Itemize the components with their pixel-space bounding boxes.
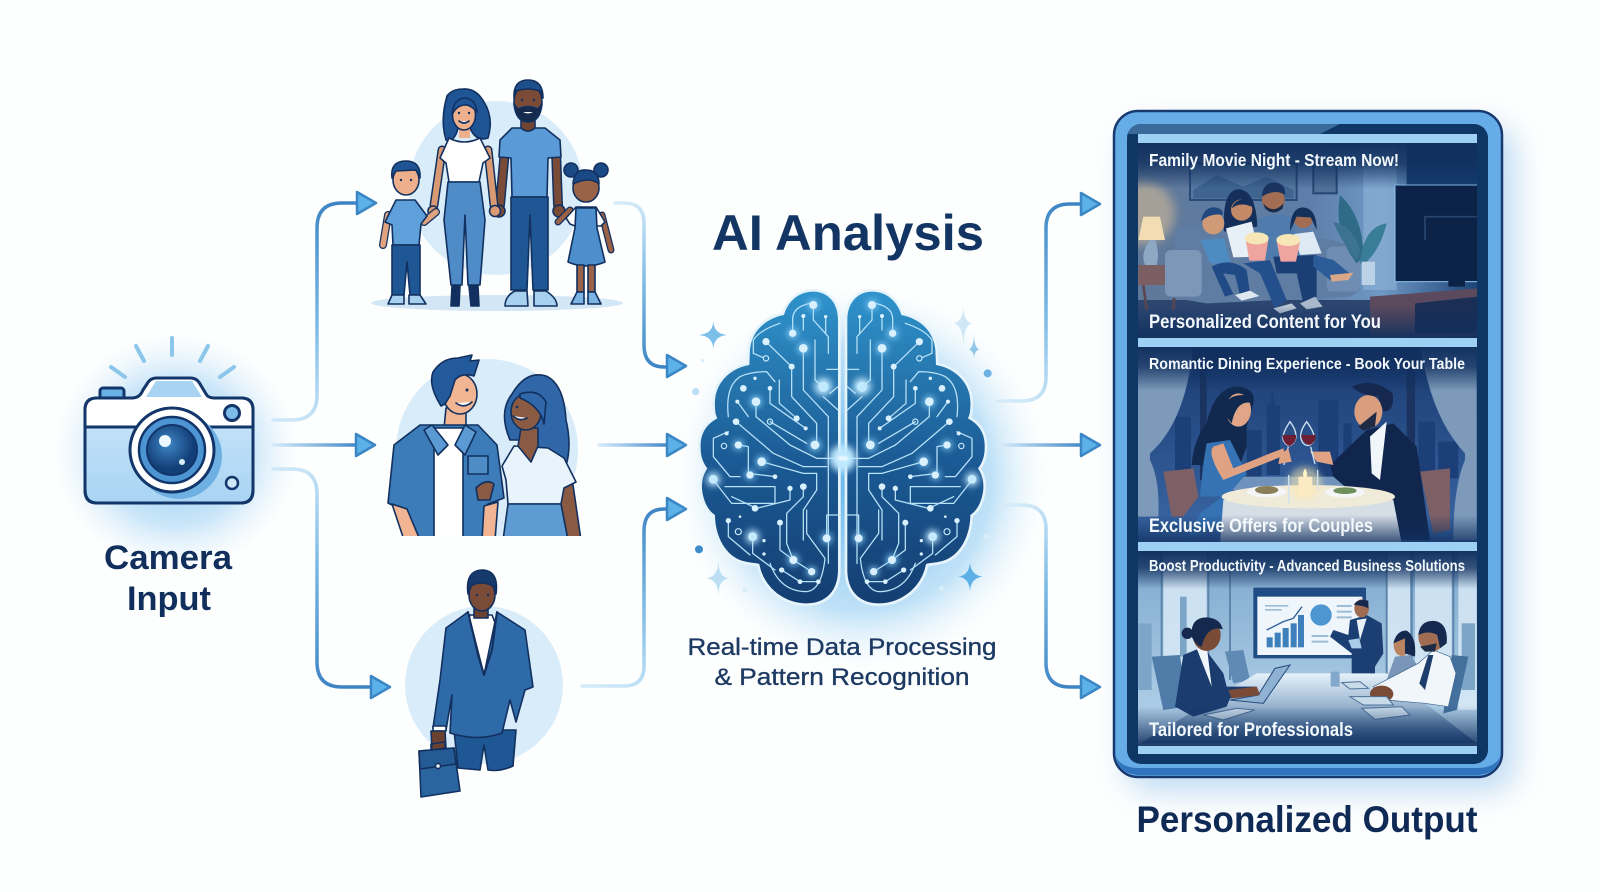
panel 1 tagline: Personalized Content for You [1149,312,1381,333]
table items [1203,682,1410,720]
family on sofa [1257,215,1302,260]
city skyline [1175,403,1458,478]
panel 3 tagline: Tailored for Professionals [1149,720,1353,741]
display frame [1114,111,1502,777]
audience: professional [405,570,563,797]
arrows from audience to brain [582,203,686,686]
seated man [1373,650,1456,707]
lamp and table [1138,217,1165,240]
brain glow [677,288,1047,668]
infographic canvas [66,79,1532,840]
arrows from brain to output [998,193,1100,698]
panel 3 headline: Boost Productivity - Advanced Business Solutions [1149,558,1465,575]
sofa family legs [1212,262,1250,297]
sparkles [692,307,992,595]
sofa [1165,226,1360,303]
man [1330,423,1430,540]
briefcase [419,742,460,797]
table [1220,500,1402,542]
icon: camera [85,378,253,503]
tv [1395,185,1482,282]
panel: family movie [1138,148,1477,338]
panel 2 tagline: Exclusive Offers for Couples [1149,516,1373,537]
flash rays [111,338,234,377]
woman [502,375,581,540]
wine glasses [1283,422,1318,503]
woman with laptop [1175,647,1260,717]
label: camera input: Input [127,580,211,618]
camera glow [54,334,298,570]
icon: circuit brain [692,292,992,603]
presentation screen [1253,588,1366,658]
light bars [1138,134,1477,754]
caption: data processing [688,634,996,691]
father [493,80,565,306]
seated woman [1386,655,1416,680]
panel: romantic dining [1138,347,1477,543]
boy [383,161,436,304]
man [388,355,504,540]
woman [1192,387,1254,465]
mother [428,89,500,306]
audience: family [371,80,623,311]
arrows from camera to audience [273,192,390,698]
panel 1 headline: Family Movie Night - Stream Now! [1149,150,1399,170]
chairs [1152,655,1182,710]
candle [1288,467,1322,500]
audience: couple [388,355,581,541]
popcorn [1246,240,1268,261]
personalized output display [1112,111,1517,793]
label: personalized output: Personalized Output [1136,799,1478,840]
presenter [1330,615,1383,680]
label: camera input: Camera [104,539,233,577]
girl [558,163,611,304]
label: camera input [104,539,233,618]
table [1140,673,1477,743]
panel 2 headline: Romantic Dining Experience - Book Your Table [1149,356,1465,373]
chairs [1163,468,1198,517]
plant [1339,195,1363,263]
display shadow [1125,125,1517,793]
caption: data processing: Real-time Data Processing [688,634,996,661]
panel: business meeting [1138,550,1477,746]
camera input group [54,334,298,618]
curtains [1138,347,1193,517]
caption: data processing: & Pattern Recognition [714,664,970,691]
title: AI Analysis: AI Analysis [712,205,984,261]
